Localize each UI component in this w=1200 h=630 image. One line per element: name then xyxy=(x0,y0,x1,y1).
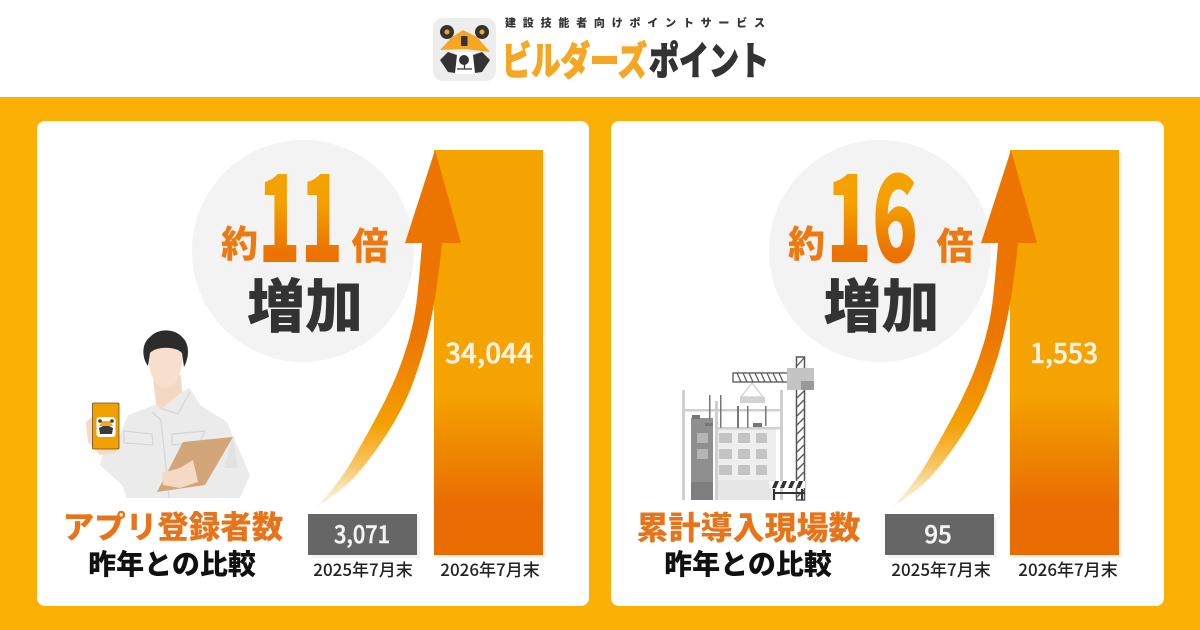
panel: cumulative sites xyxy=(611,121,1164,606)
multiplier text: 約 xyxy=(221,214,258,268)
multiplier text: 約 xyxy=(788,214,825,268)
logo name: point: ポイント xyxy=(649,31,769,87)
highlight circle xyxy=(192,140,414,362)
increase label: 増加 xyxy=(247,260,363,344)
bar: 2026: 34,044 xyxy=(445,332,533,371)
date label 2026: 2026年7月末 xyxy=(1018,556,1118,581)
bar: 2025 xyxy=(308,514,420,558)
panel subheading: 昨年との比較 xyxy=(664,543,832,583)
card background xyxy=(37,121,589,606)
highlight circle xyxy=(769,140,991,362)
multiplier text: 倍 xyxy=(936,216,974,270)
logo xyxy=(433,14,769,87)
card background xyxy=(611,121,1164,606)
bar: 2025: 95 xyxy=(924,515,952,550)
bar: 2026 xyxy=(434,150,546,558)
multiplier text: 倍 xyxy=(352,216,388,270)
icon: bear helmet app logo xyxy=(433,18,496,81)
date label 2025: 2025年7月末 xyxy=(891,556,991,581)
date label 2026: 2026年7月末 xyxy=(440,556,540,581)
logo tagline: 建設技能者向けポイントサービス xyxy=(505,14,765,30)
multiplier text: 11 xyxy=(258,125,343,296)
bar: 2026 xyxy=(1010,150,1122,558)
arrow xyxy=(317,150,461,507)
date label 2025: 2025年7月末 xyxy=(313,556,413,581)
panel: app registrations xyxy=(37,121,589,606)
bar: 2025 xyxy=(885,514,997,558)
panel subheading: 昨年との比較 xyxy=(88,543,256,583)
bar: 2026: 1,553 xyxy=(1030,332,1098,371)
multiplier text: 16 xyxy=(826,125,918,296)
panel heading: アプリ登録者数 xyxy=(63,502,284,548)
panel heading: 累計導入現場数 xyxy=(636,503,861,549)
icon: building under construction with crane xyxy=(682,357,814,500)
arrow xyxy=(893,150,1037,507)
icon: worker holding phone xyxy=(86,330,250,498)
logo name: builders: ビルダーズ xyxy=(502,31,647,87)
increase label: 増加 xyxy=(823,260,940,344)
bar: 2025: 3,071 xyxy=(334,515,390,550)
